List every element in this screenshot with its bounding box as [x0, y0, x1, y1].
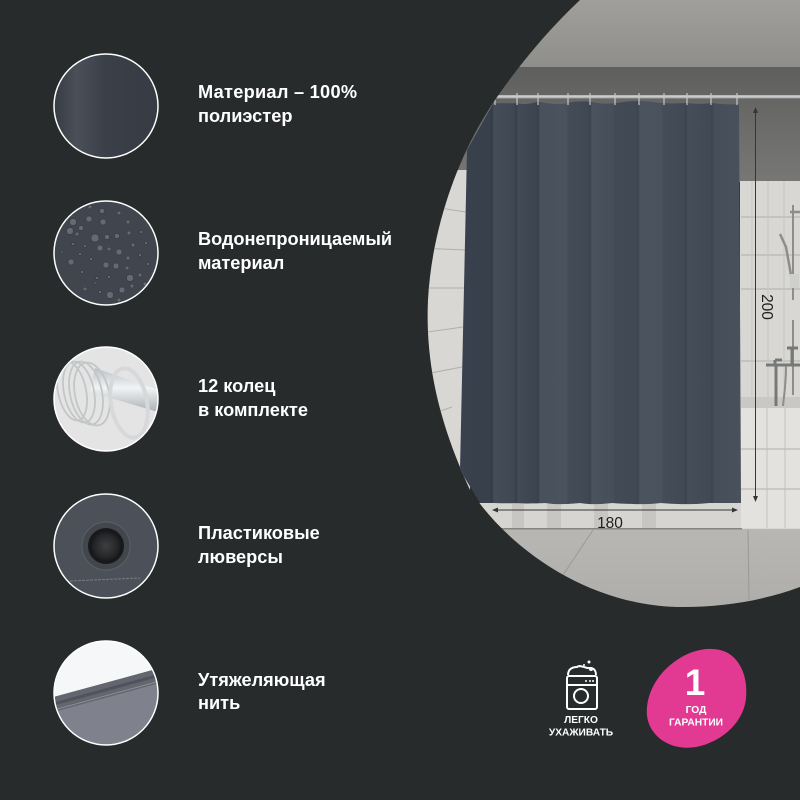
ceiling: [519, 0, 800, 67]
floor: [502, 528, 800, 607]
dimension: width 180: 180: [597, 515, 623, 532]
dimension: height 200: [753, 107, 775, 502]
dimension: height 200: 200: [758, 294, 775, 320]
badge: 1 year warranty: 1: [685, 662, 705, 703]
feature 4 text: Пластиковые: [198, 523, 320, 543]
caption: easy care: УХАЖИВАТЬ: [549, 728, 613, 738]
feature 5 text: Утяжеляющая: [198, 670, 326, 690]
feature 3 text: 12 колец: [198, 376, 275, 396]
feature 2 text: Водонепроницаемый: [198, 229, 392, 249]
feature 4 text: люверсы: [198, 547, 283, 567]
icon: washing machine: [567, 660, 597, 709]
feature 3: rings on rod swatch: [52, 347, 162, 451]
wall tiles: [420, 170, 800, 530]
badge: 1 year warranty: [647, 649, 746, 748]
badge: 1 year warranty: ГАРАНТИИ: [669, 718, 723, 728]
curtain: [460, 101, 741, 504]
feature 2 text: материал: [198, 253, 284, 273]
curtain reflections on lower tiles: [512, 504, 656, 528]
feature 4: grommet swatch: [54, 494, 158, 598]
shower mixer and hose: [766, 205, 800, 406]
curtain rings: [495, 93, 737, 105]
feature 5 text: нить: [198, 693, 240, 713]
feature 5: weighted thread swatch: [50, 641, 160, 750]
curtain rod: [496, 95, 800, 98]
feature 3 text: в комплекте: [198, 400, 308, 420]
feature 1 text: полиэстер: [198, 106, 292, 126]
badge: 1 year warranty: ГОД: [686, 705, 706, 716]
feature 2: water droplets swatch: [54, 201, 158, 305]
bathtub: [741, 397, 800, 528]
feature 1 text: Материал – 100%: [198, 82, 357, 102]
upper wall: [420, 67, 800, 182]
photo: bathroom with curtain: [420, 0, 800, 609]
caption: easy care: ЛЕГКО: [564, 715, 598, 726]
feature 1: material swatch: [54, 54, 158, 158]
dimension: width 180: [492, 508, 738, 532]
